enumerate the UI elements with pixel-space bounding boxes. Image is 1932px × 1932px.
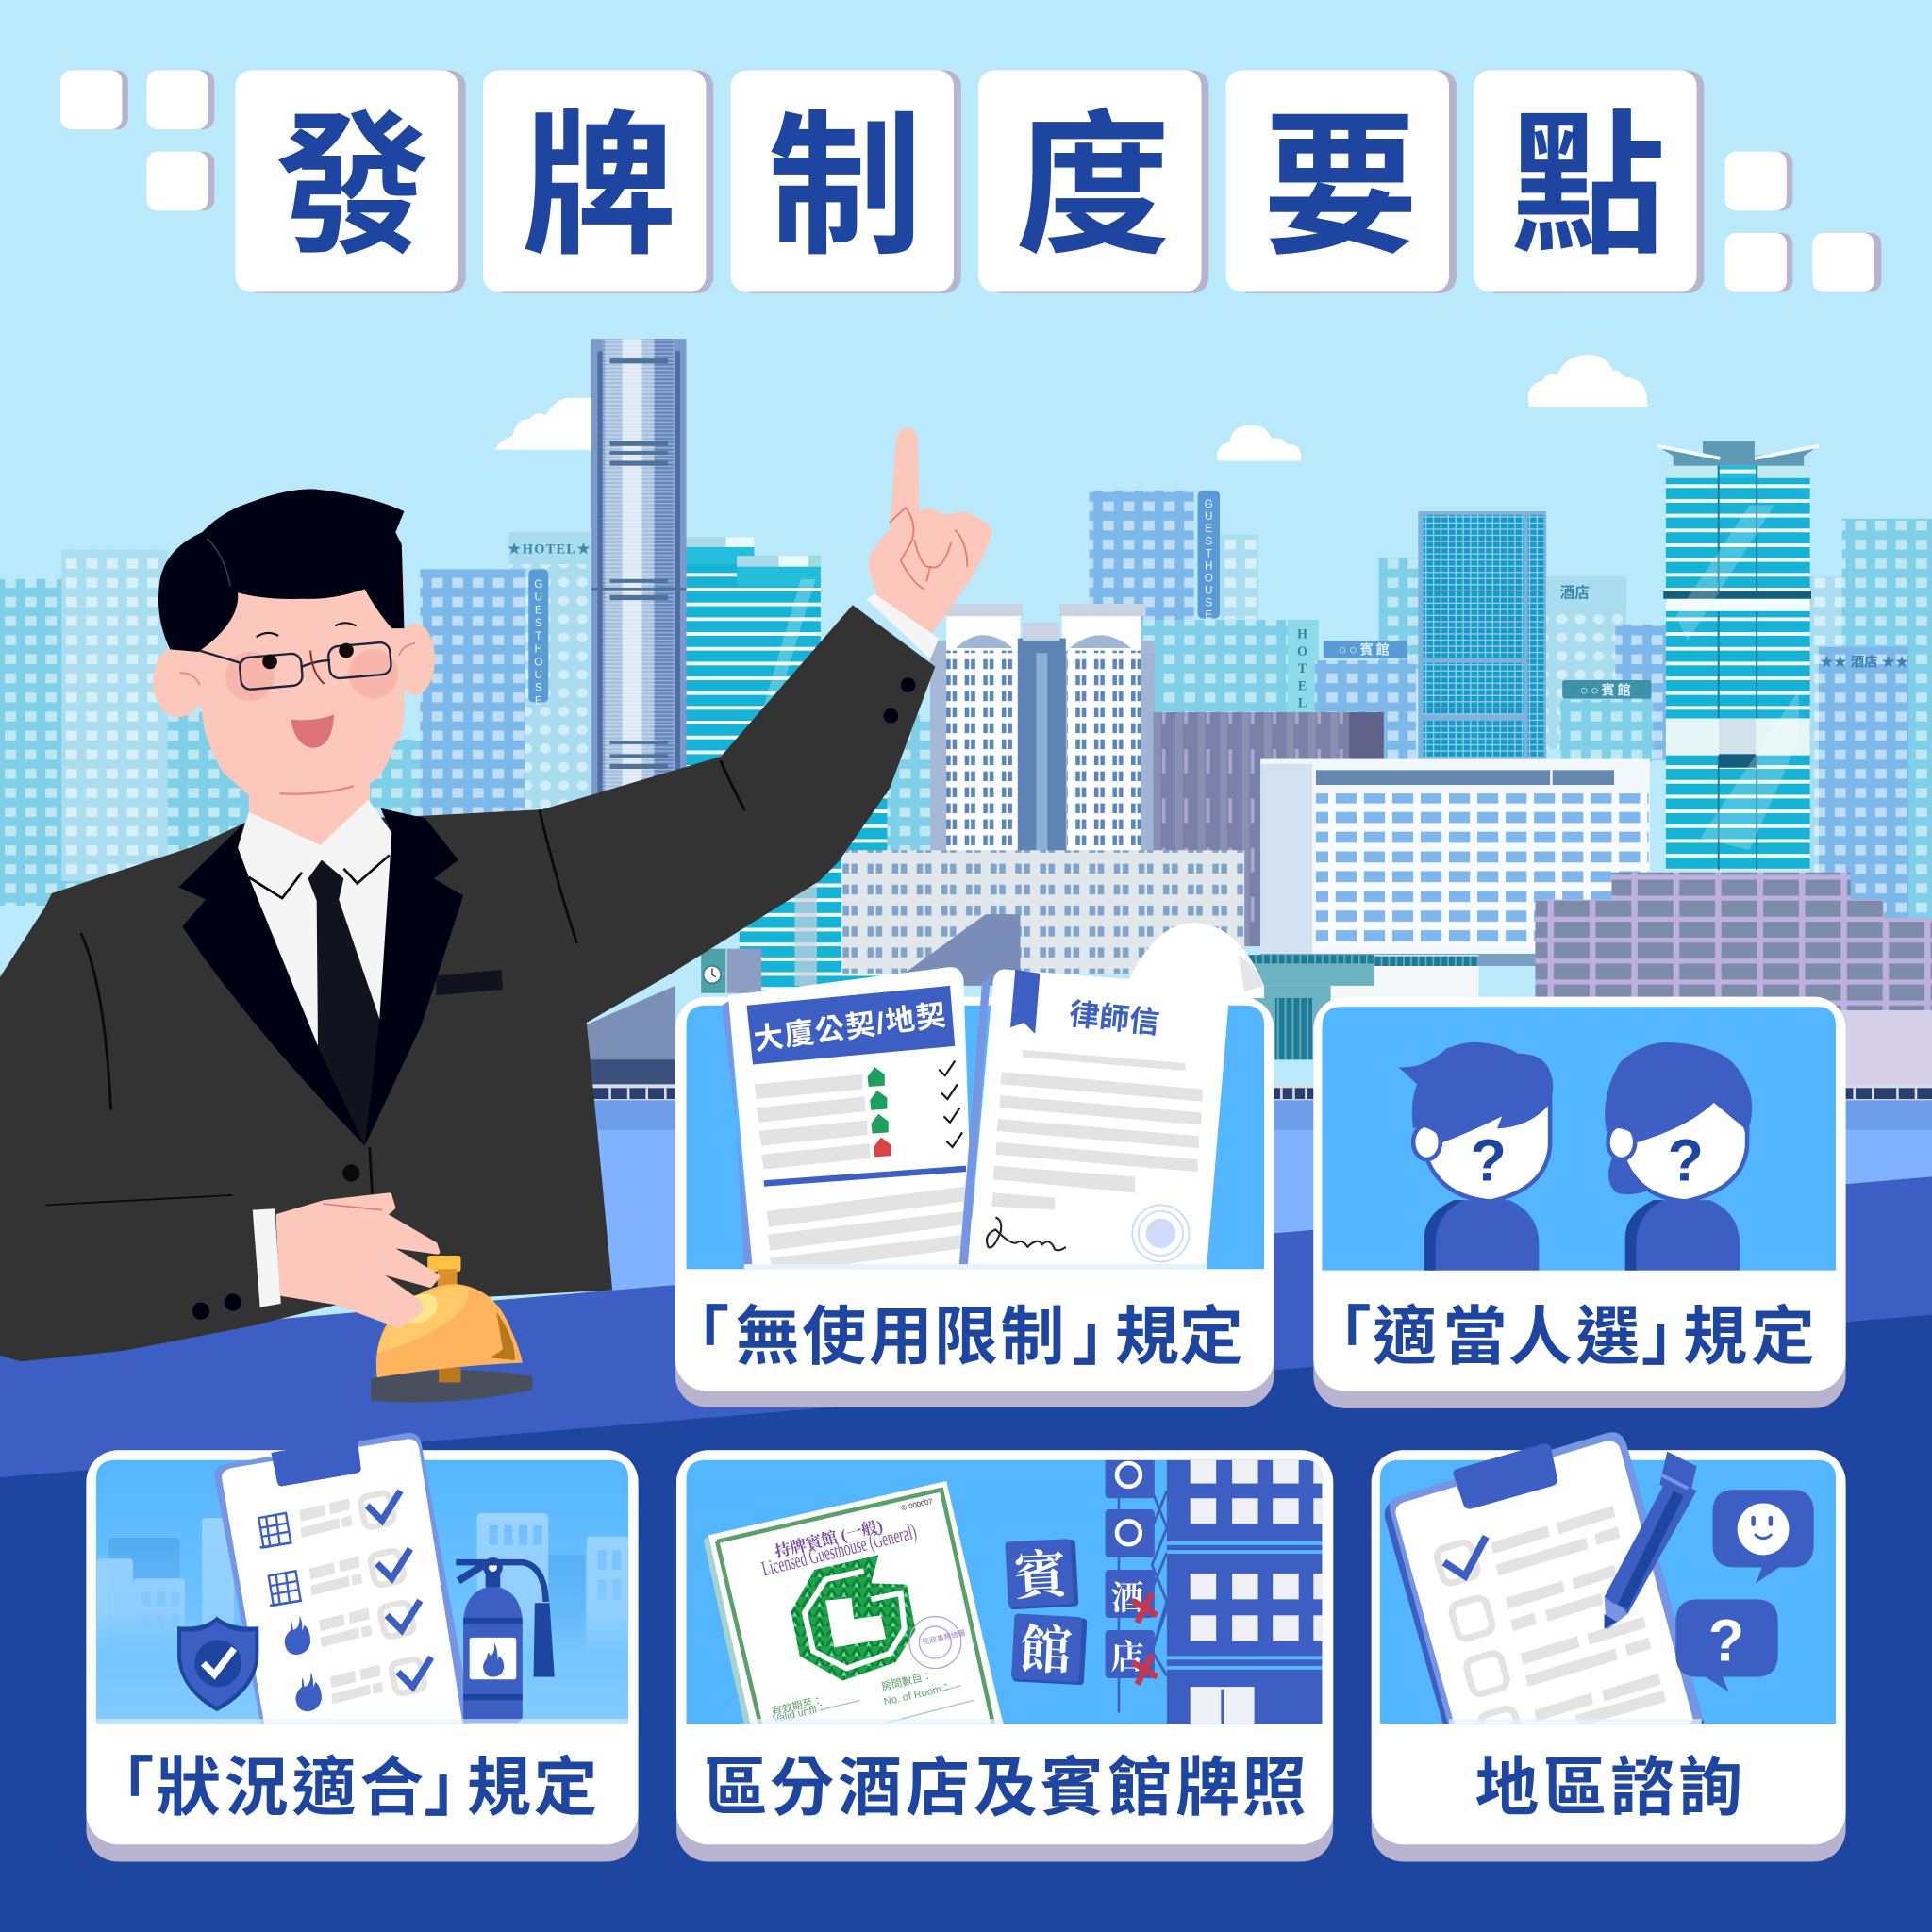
label: 區分酒店及賓館牌照 bbox=[704, 1754, 1306, 1824]
purple building bbox=[1154, 712, 1384, 946]
tile 牌: 牌 bbox=[521, 100, 676, 274]
ear lines bbox=[180, 643, 415, 685]
guesthouse sign 2: H bbox=[1205, 559, 1213, 572]
cuff raised bbox=[866, 594, 939, 659]
bubble question bbox=[1675, 1599, 1778, 1691]
neck bbox=[249, 774, 370, 850]
person: woman bbox=[1605, 1042, 1752, 1271]
hotel chinese sign 2: ★★ 酒店 ★★ bbox=[1820, 655, 1908, 671]
suit bbox=[0, 605, 935, 1361]
vertical sign bbox=[1106, 1454, 1157, 1684]
guesthouse sign 2: E bbox=[1205, 609, 1212, 622]
tile 牌 bbox=[483, 70, 713, 293]
hotel sign: ★HOTEL★ bbox=[508, 541, 591, 557]
guesthouse sign: E bbox=[535, 604, 542, 616]
purple stepped building bbox=[1535, 873, 1932, 1091]
glasses bbox=[200, 641, 391, 691]
tile 點 bbox=[1474, 70, 1704, 293]
hotel vertical sign: T bbox=[1298, 661, 1307, 676]
licence certificate: 有效期至： bbox=[770, 1693, 824, 1718]
label: 「適當人選」規定 bbox=[1307, 1303, 1815, 1374]
water bbox=[585, 1100, 1932, 1470]
guesthouse sign 2 bbox=[1198, 491, 1220, 622]
rows bbox=[258, 1491, 400, 1547]
guesthouse sign: U bbox=[535, 669, 542, 681]
guesthouse sign 2: O bbox=[1205, 572, 1213, 584]
guesthouse sign: G bbox=[534, 578, 542, 591]
licence certificate: 房間數目： bbox=[880, 1669, 934, 1693]
title tiles bbox=[60, 70, 1881, 293]
pocket bbox=[436, 970, 503, 995]
guesthouse sign chinese 2: ○○賓館 bbox=[1580, 682, 1633, 699]
decorative squares bbox=[60, 70, 1881, 292]
deed of mutual covenant document: 大廈公契/地契 bbox=[752, 998, 949, 1057]
low white colonial building bbox=[841, 850, 1244, 974]
illustration: two documents bbox=[722, 967, 1228, 1274]
guesthouse sign: H bbox=[535, 643, 542, 656]
button bbox=[342, 1164, 359, 1182]
lapel left bbox=[178, 823, 365, 1146]
tall tower bbox=[591, 339, 687, 794]
person: man: ? bbox=[1471, 1127, 1507, 1193]
guesthouse sign: S bbox=[535, 682, 542, 694]
guesthouse sign 2: S bbox=[1205, 535, 1212, 547]
clock tower bbox=[701, 949, 725, 993]
chin line bbox=[279, 786, 354, 794]
licence certificate: Licensed Guesthouse (General) bbox=[759, 1520, 919, 1581]
guesthouse sign chinese bbox=[1324, 641, 1407, 658]
guesthouse sign: T bbox=[535, 630, 541, 642]
hotel vertical sign: E bbox=[1298, 678, 1307, 693]
guesthouse sign: E bbox=[535, 694, 542, 707]
guesthouse sign 2: T bbox=[1206, 547, 1212, 559]
card: separate hotel and guesthouse licences bbox=[676, 1450, 1333, 1862]
skyline left bbox=[0, 532, 591, 906]
bubble question: ? bbox=[1708, 1608, 1744, 1674]
hotel vertical sign: O bbox=[1297, 644, 1307, 659]
hotel chinese sign: 酒店 bbox=[1560, 584, 1590, 601]
harbour railing bbox=[585, 1084, 1932, 1102]
guesthouse sign 2: U bbox=[1205, 585, 1213, 597]
sleeve buttons bbox=[192, 677, 915, 1320]
teal main tower bbox=[1657, 441, 1819, 870]
person: man bbox=[1398, 1042, 1553, 1271]
label: 「狀況適合」規定 bbox=[90, 1754, 597, 1824]
skyline teal towers bbox=[687, 537, 937, 991]
desk bbox=[0, 1176, 1932, 1932]
guesthouse sign chinese 2 bbox=[1562, 680, 1651, 699]
lawyer's letter document: 律師信 bbox=[1068, 997, 1161, 1040]
licence certificate: 民政事務總署 bbox=[921, 1627, 967, 1647]
guesthouse sign bbox=[528, 569, 548, 707]
fire extinguisher bbox=[456, 1557, 555, 1723]
nose bbox=[310, 651, 325, 684]
hotel vertical sign: H bbox=[1297, 627, 1307, 642]
guesthouse tiles: 賓 bbox=[1013, 1545, 1075, 1606]
bubble smiley bbox=[1713, 1490, 1814, 1583]
guesthouse sign: O bbox=[534, 656, 542, 668]
tile 要: 要 bbox=[1263, 100, 1418, 274]
licence certificate bbox=[704, 1481, 1003, 1725]
card: no-use restriction bbox=[665, 967, 1274, 1407]
tile 度: 度 bbox=[1015, 100, 1171, 274]
tile 制 bbox=[731, 70, 961, 293]
tile 制: 制 bbox=[768, 100, 923, 274]
licence certificate: Valid until： bbox=[772, 1702, 828, 1725]
tile 要 bbox=[1226, 70, 1457, 293]
tile 度 bbox=[978, 70, 1208, 293]
guesthouse sign 2: G bbox=[1205, 498, 1213, 510]
guesthouse sign: S bbox=[535, 617, 542, 629]
person: woman: ? bbox=[1668, 1127, 1704, 1193]
guesthouse sign 2: S bbox=[1205, 597, 1212, 609]
label: 地區諮詢 bbox=[1474, 1754, 1742, 1824]
licence certificate: © 000007 bbox=[901, 1497, 934, 1512]
licence certificate: No. of Room： bbox=[883, 1681, 953, 1708]
vertical sign: 店 bbox=[1110, 1639, 1144, 1675]
man character bbox=[0, 427, 992, 1403]
collar lines bbox=[249, 855, 390, 898]
tile 點: 點 bbox=[1510, 100, 1666, 274]
lower hand bbox=[278, 1195, 438, 1325]
label: 「無使用限制」規定 bbox=[665, 1303, 1243, 1374]
licence certificate: 持牌賓館 (一般) bbox=[773, 1516, 885, 1561]
building with signs bbox=[1005, 1454, 1322, 1724]
lapel right bbox=[365, 808, 463, 1146]
guesthouse sign 2: E bbox=[1205, 523, 1212, 535]
deed of mutual covenant document bbox=[722, 967, 974, 1274]
skyline right back bbox=[1090, 491, 1932, 925]
cuff lower bbox=[253, 1208, 281, 1307]
pencil bbox=[1605, 1452, 1697, 1630]
front blue-window hotel bbox=[1260, 759, 1650, 966]
eyes and brows bbox=[257, 623, 356, 669]
suit creases bbox=[47, 761, 744, 1205]
dark floor bbox=[0, 1315, 1932, 1932]
guesthouse sign chinese: ○○賓館 bbox=[1339, 641, 1391, 658]
faded buildings bbox=[96, 1513, 628, 1653]
tile 發 bbox=[235, 70, 466, 293]
face bbox=[169, 573, 405, 801]
guesthouse sign: U bbox=[535, 591, 542, 604]
bell bbox=[371, 1256, 532, 1403]
clipboard bbox=[1385, 1432, 1706, 1751]
shield bbox=[177, 1617, 258, 1711]
white twin tower hotel bbox=[930, 604, 1155, 853]
lawyer's letter document bbox=[958, 970, 1228, 1272]
tile 發: 發 bbox=[275, 100, 430, 274]
vertical sign: 酒 bbox=[1110, 1580, 1144, 1617]
pointing hand bbox=[869, 427, 992, 636]
waterfront low buildings bbox=[585, 914, 1478, 1084]
cheeks bbox=[225, 649, 398, 701]
shirt bbox=[238, 800, 391, 1046]
clipboard bbox=[214, 1433, 474, 1727]
guesthouse tiles bbox=[1005, 1539, 1087, 1685]
hair bbox=[158, 489, 404, 652]
guesthouse tiles: 館 bbox=[1019, 1621, 1074, 1681]
card: district consultation bbox=[1372, 1432, 1846, 1862]
card: fit and proper person bbox=[1307, 997, 1846, 1408]
hotel vertical sign: L bbox=[1298, 696, 1307, 711]
mouth bbox=[291, 715, 334, 748]
tie bbox=[308, 860, 379, 1146]
clouds bbox=[495, 355, 1647, 460]
ears bbox=[153, 624, 435, 717]
green G logo bbox=[791, 1555, 915, 1681]
card: suitable premises bbox=[86, 1433, 639, 1862]
guesthouse sign 2: U bbox=[1205, 510, 1213, 523]
